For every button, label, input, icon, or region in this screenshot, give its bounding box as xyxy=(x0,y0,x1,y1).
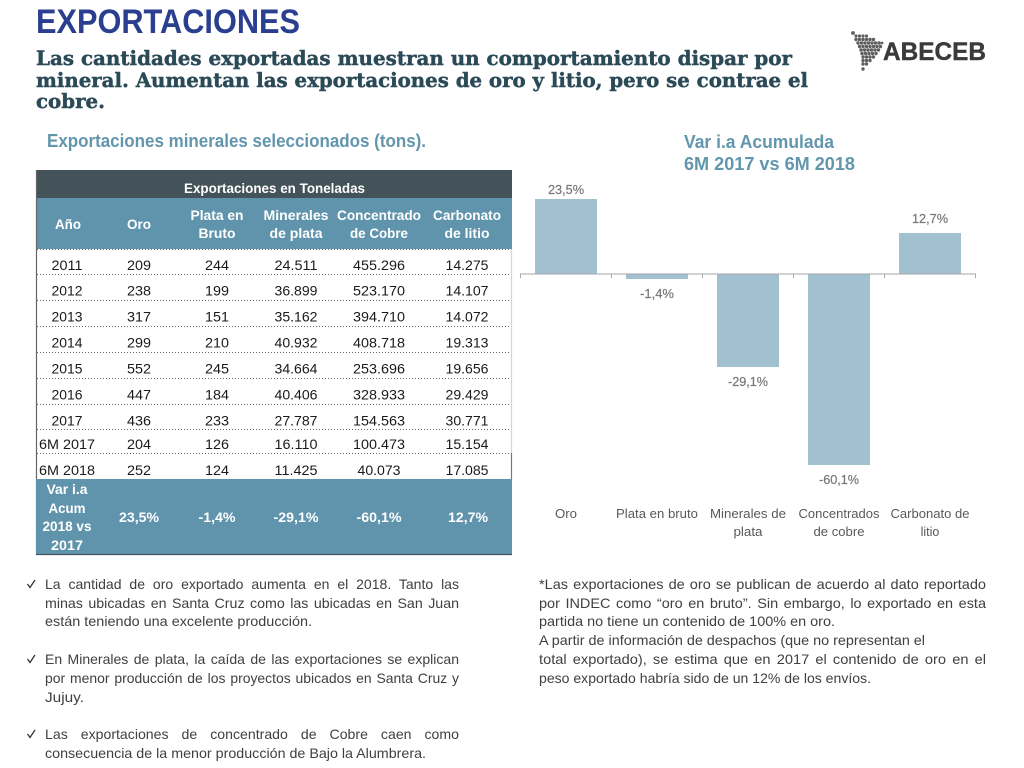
table data rows: 328.933 xyxy=(353,386,405,402)
category labels: Oro xyxy=(555,507,577,521)
table data rows xyxy=(39,257,489,478)
value labels: 23,5% xyxy=(548,183,584,197)
table data rows: 151 xyxy=(205,308,229,324)
table data rows: 124 xyxy=(205,462,229,478)
table data rows: 394.710 xyxy=(353,308,405,324)
table data rows: 30.771 xyxy=(446,412,489,428)
table data rows: 6M 2018 xyxy=(39,462,95,478)
footnote text: peso exportado habría sido de un 12% de los envíos. xyxy=(539,670,871,686)
bar chart xyxy=(520,183,976,539)
table data rows: 2015 xyxy=(52,360,83,376)
table data rows: 2011 xyxy=(52,257,83,273)
table column headers: Minerales xyxy=(264,207,329,223)
table data rows: 2016 xyxy=(52,386,83,402)
table data rows: 436 xyxy=(127,412,151,428)
chart heading: 6M 2017 vs 6M 2018 xyxy=(684,154,855,174)
table data rows: 40.073 xyxy=(358,462,401,478)
category labels: plata xyxy=(734,525,763,539)
table column headers: Concentrado xyxy=(337,207,421,223)
bullet list xyxy=(28,576,459,761)
subtitle: Las cantidades exportadas muestran un comportamiento dispar por xyxy=(36,46,792,70)
bullet: plata: En Minerales de plata, la caída de las exportaciones se explican xyxy=(45,651,459,667)
table data rows: 245 xyxy=(205,360,229,376)
table data rows: 2012 xyxy=(52,282,83,298)
table data rows: 100.473 xyxy=(353,436,405,452)
table variation row: -1,4% xyxy=(198,509,236,525)
table data rows: 447 xyxy=(127,386,151,402)
chart heading xyxy=(684,132,855,174)
bullet: cobre xyxy=(28,726,459,761)
table data rows: 552 xyxy=(127,360,151,376)
table variation row: 23,5% xyxy=(119,509,160,525)
table data rows: 17.085 xyxy=(446,462,489,478)
footnote text: por INDEC como “oro en bruto”. Sin embargo, lo exportado en esta xyxy=(539,595,986,611)
table data rows: 299 xyxy=(127,334,151,350)
bullet: oro: minas ubicadas en Santa Cruz como las ubicadas en San Juan xyxy=(45,595,459,611)
bullet: plata xyxy=(28,651,459,705)
table column headers xyxy=(55,207,501,241)
table: exportaciones en toneladas xyxy=(36,170,512,555)
table data rows: 233 xyxy=(205,412,229,428)
table data rows: 11.425 xyxy=(274,462,318,478)
table data rows: 27.787 xyxy=(274,412,318,428)
category labels: Minerales de xyxy=(710,507,786,521)
table data rows: 317 xyxy=(127,308,151,324)
bullet: plata: por menor producción de los proyectos ubicados en Santa Cruz y xyxy=(45,670,459,686)
table data rows: 455.296 xyxy=(353,257,405,273)
table data rows: 184 xyxy=(205,386,229,402)
table data rows: 40.932 xyxy=(274,334,318,350)
table data rows: 19.313 xyxy=(446,334,489,350)
subtitle: cobre. xyxy=(36,89,105,113)
table data rows: 19.656 xyxy=(446,360,489,376)
table data rows: 244 xyxy=(205,257,229,273)
table variation row xyxy=(42,481,489,553)
table column headers: Carbonato xyxy=(433,207,501,223)
table data rows: 252 xyxy=(127,462,151,478)
table column headers: Año xyxy=(55,216,81,232)
category labels: de cobre xyxy=(814,525,865,539)
table data rows: 36.899 xyxy=(274,282,318,298)
table data rows: 238 xyxy=(127,282,151,298)
table data rows: 2013 xyxy=(52,308,83,324)
bullet: oro xyxy=(28,576,459,629)
table data rows: 210 xyxy=(205,334,229,350)
value labels: -1,4% xyxy=(640,287,674,301)
chart heading: Var i.a Acumulada xyxy=(684,132,835,152)
table data rows: 14.107 xyxy=(446,282,489,298)
table data rows: 154.563 xyxy=(353,412,405,428)
bullet: cobre: Las exportaciones de concentrado de Cobre caen como xyxy=(45,726,459,742)
table heading: Exportaciones minerales seleccionados (tons). xyxy=(47,131,426,151)
table data rows: 209 xyxy=(127,257,151,273)
value labels xyxy=(548,183,948,487)
category labels: Concentrados xyxy=(798,507,880,521)
logo: ABECEB: ABECEB xyxy=(883,38,986,66)
table data rows: 14.072 xyxy=(446,308,489,324)
bullet: oro: están teniendo una excelente producción. xyxy=(45,613,312,629)
footnote text: total exportado), se estima que en 2017 el contenido de oro en el xyxy=(539,651,986,667)
table variation row: -60,1% xyxy=(356,509,402,525)
bullet: oro: La cantidad de oro exportado aumenta en el 2018. Tanto las xyxy=(45,576,459,592)
table column headers: Oro xyxy=(127,216,151,232)
bullet: plata: Jujuy. xyxy=(45,689,84,705)
table variation row: Var i.a xyxy=(46,481,88,497)
table column headers: Bruto xyxy=(198,225,236,241)
category labels: Plata en bruto xyxy=(616,507,698,521)
table variation row: 2017 xyxy=(51,537,83,553)
category labels xyxy=(555,507,970,539)
table data rows: 15.154 xyxy=(446,436,489,452)
table data rows: 34.664 xyxy=(274,360,318,376)
table title row: Exportaciones en Toneladas xyxy=(184,180,365,196)
footnote text: *Las exportaciones de oro se publican de acuerdo al dato reportado xyxy=(539,576,986,592)
table variation row: 12,7% xyxy=(448,509,489,525)
value labels: -29,1% xyxy=(728,375,768,389)
table data rows: 126 xyxy=(205,436,229,452)
table data rows: 523.170 xyxy=(353,282,405,298)
logo: ABECEB xyxy=(851,31,986,71)
category labels: Carbonato de xyxy=(890,507,970,521)
table data rows: 2017 xyxy=(52,412,83,428)
footnote text xyxy=(539,576,986,686)
table data rows: 2014 xyxy=(52,334,83,350)
table column headers: de Cobre xyxy=(350,225,408,241)
title: EXPORTACIONES xyxy=(36,3,300,41)
category labels: litio xyxy=(921,525,939,539)
bullet: cobre: consecuencia de la menor producción de Bajo la Alumbrera. xyxy=(45,745,426,761)
value labels: -60,1% xyxy=(819,473,859,487)
table data rows: 35.162 xyxy=(274,308,318,324)
table variation row: -29,1% xyxy=(274,509,319,525)
table data rows: 199 xyxy=(205,282,229,298)
table variation row: 2018 vs xyxy=(42,518,92,534)
subtitle xyxy=(36,46,808,113)
value labels: 12,7% xyxy=(912,212,948,226)
table data rows: 29.429 xyxy=(446,386,489,402)
footnote text: A partir de información de despachos (que no representan el xyxy=(539,632,925,648)
table data rows: 40.406 xyxy=(274,386,318,402)
footnote text: partida no tiene un contenido de 100% en oro. xyxy=(539,613,835,629)
table variation row: Acum xyxy=(48,500,86,516)
table data rows: 24.511 xyxy=(274,257,318,273)
table column headers: de plata xyxy=(270,225,323,241)
table data rows: 253.696 xyxy=(353,360,405,376)
table data rows: 6M 2017 xyxy=(39,436,95,452)
table data rows: 408.718 xyxy=(353,334,405,350)
table column headers: de litio xyxy=(444,225,490,241)
bars xyxy=(535,199,961,465)
table data rows: 204 xyxy=(127,436,151,452)
subtitle: mineral. Aumentan las exportaciones de oro y litio, pero se contrae el xyxy=(36,68,808,92)
table data rows: 14.275 xyxy=(446,257,489,273)
table column headers: Plata en xyxy=(190,207,244,223)
table data rows: 16.110 xyxy=(274,436,318,452)
